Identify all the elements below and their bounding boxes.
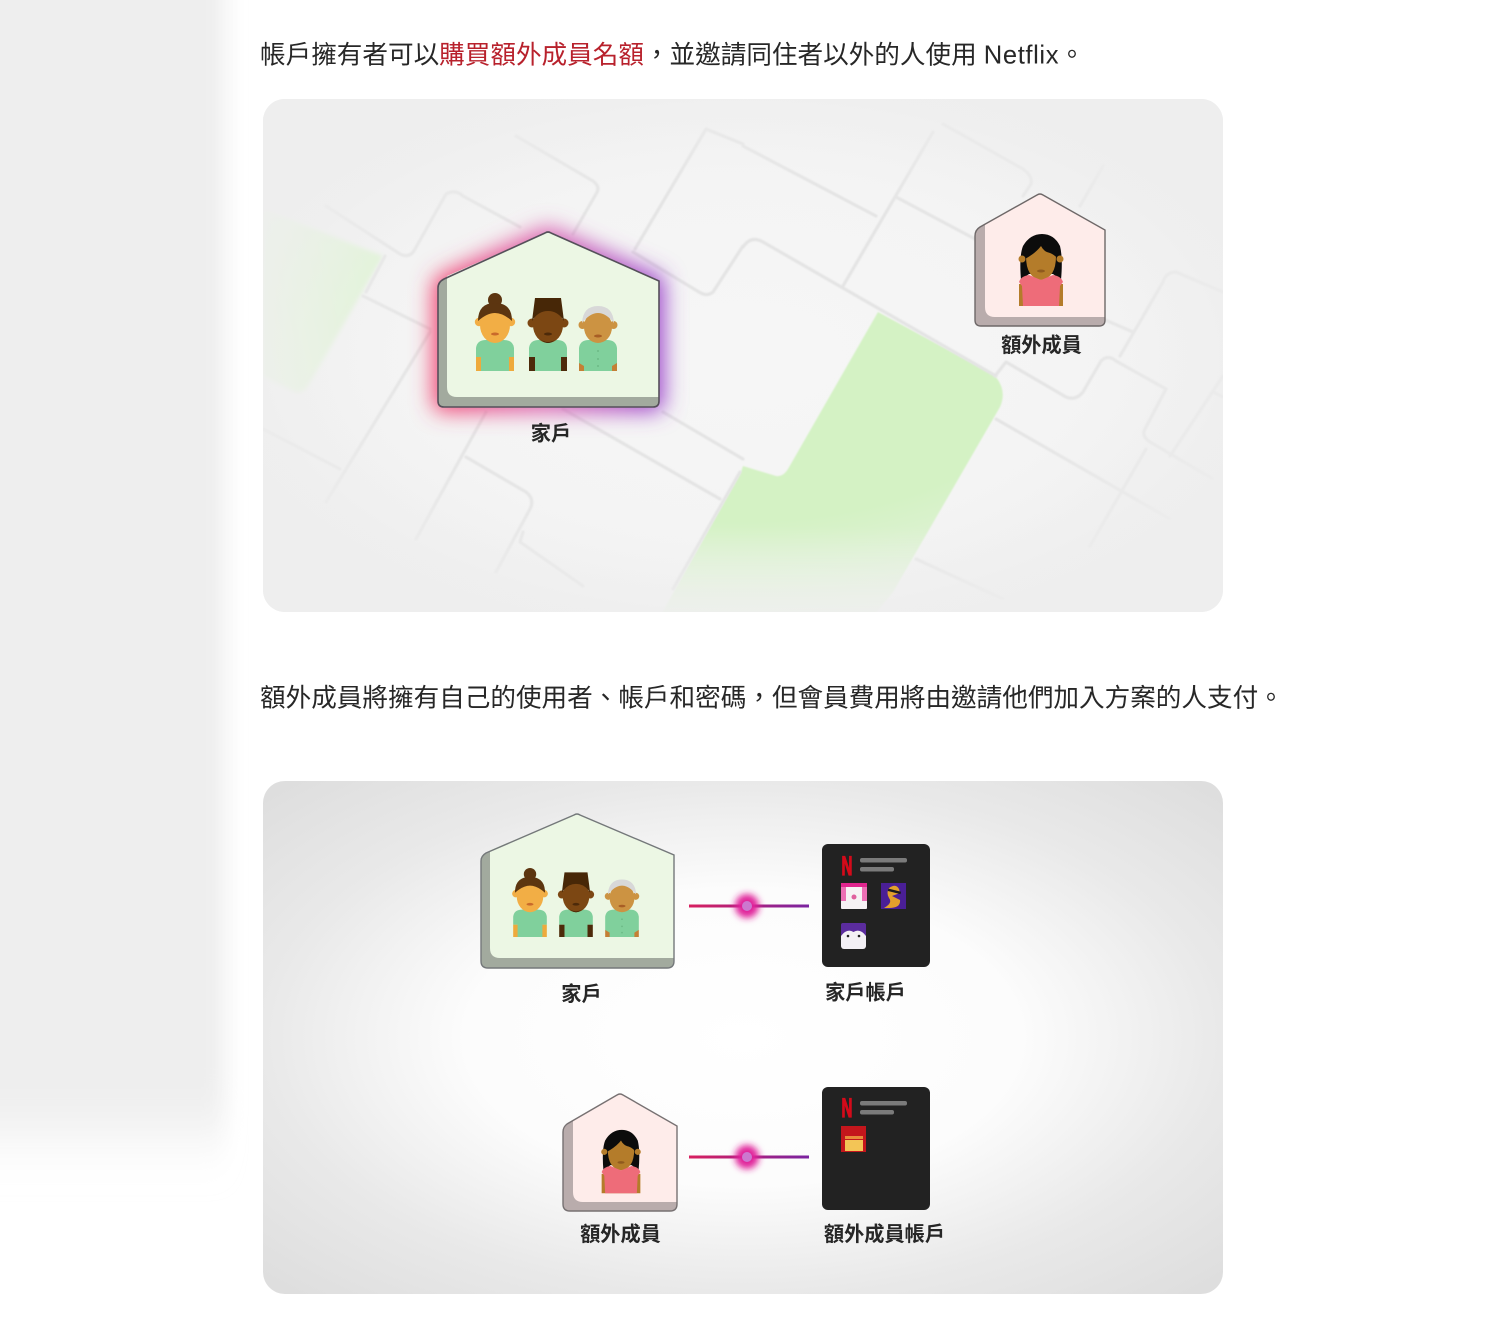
- label: extra member: 額外成員: [580, 1222, 661, 1246]
- house body: [438, 232, 659, 407]
- profile: penguin: [841, 923, 866, 949]
- person: extra member: [1018, 234, 1064, 306]
- header bars: [860, 858, 907, 872]
- connector glow: [735, 1145, 759, 1169]
- header bars: [860, 1101, 907, 1114]
- card body: [822, 1087, 930, 1210]
- label: household: 家戶: [531, 422, 571, 446]
- person: man: [558, 872, 594, 937]
- house outline: [481, 814, 674, 968]
- house front: [573, 1094, 677, 1202]
- connector node: [742, 901, 752, 911]
- Netflix N: N: [842, 1092, 852, 1123]
- profile: duck: [881, 883, 906, 909]
- label: household account: 家戶帳戶: [825, 980, 906, 1004]
- background sidebar: [0, 0, 225, 1135]
- icon: extra member house: [975, 194, 1105, 326]
- label: extra member: 額外成員: [1001, 333, 1082, 357]
- map edge vignette: [263, 210, 1169, 598]
- icon: household house: [481, 814, 674, 968]
- house outline: [563, 1094, 677, 1211]
- card: household account: [822, 844, 930, 967]
- label: extra member account: 額外成員帳戶: [824, 1222, 945, 1246]
- label: household: 家戶: [561, 982, 602, 1006]
- house outline: [975, 194, 1105, 326]
- person: extra member: [601, 1130, 641, 1193]
- panel: map of household and extra member: [263, 99, 1223, 629]
- connector node: [742, 1152, 752, 1162]
- house body: [975, 194, 1105, 326]
- person: woman: [475, 293, 515, 371]
- house front: [490, 814, 674, 958]
- map base: [343, 142, 1144, 566]
- house front: [447, 232, 659, 397]
- house body: [563, 1094, 677, 1211]
- connector: household to account: [689, 894, 809, 918]
- icon: extra member house: [563, 1094, 677, 1211]
- connector line: [689, 904, 809, 908]
- person: man: [528, 298, 568, 371]
- icon: household house with glow: [438, 232, 659, 407]
- person: elder: [578, 306, 618, 371]
- connector glow: [735, 894, 759, 918]
- person: elder: [605, 879, 639, 937]
- house body: [481, 814, 674, 968]
- card: extra member account: [822, 1087, 930, 1210]
- Netflix N: N: [842, 850, 852, 881]
- house front: [985, 194, 1105, 317]
- house outline: [438, 232, 659, 407]
- panel: accounts diagram: [263, 781, 1223, 1294]
- park: left green area: [282, 232, 382, 390]
- card body: [822, 844, 930, 967]
- house glow: [438, 232, 659, 407]
- connector: extra member to account: [689, 1145, 809, 1169]
- profile: bear: [841, 883, 867, 909]
- map streets: [354, 129, 1166, 584]
- profile: red character: [841, 1126, 866, 1152]
- body text line: 額外成員將擁有自己的使用者、帳戶和密碼，但會員費用將由邀請他們加入方案的人支付。: [260, 684, 1284, 713]
- connector line: [689, 1156, 809, 1158]
- intro text line: 帳戶擁有者可以購買額外成員名額，並邀請同住者以外的人使用 Netflix。: [260, 41, 1085, 70]
- park: central green area: [674, 312, 1004, 597]
- person: woman: [512, 868, 548, 937]
